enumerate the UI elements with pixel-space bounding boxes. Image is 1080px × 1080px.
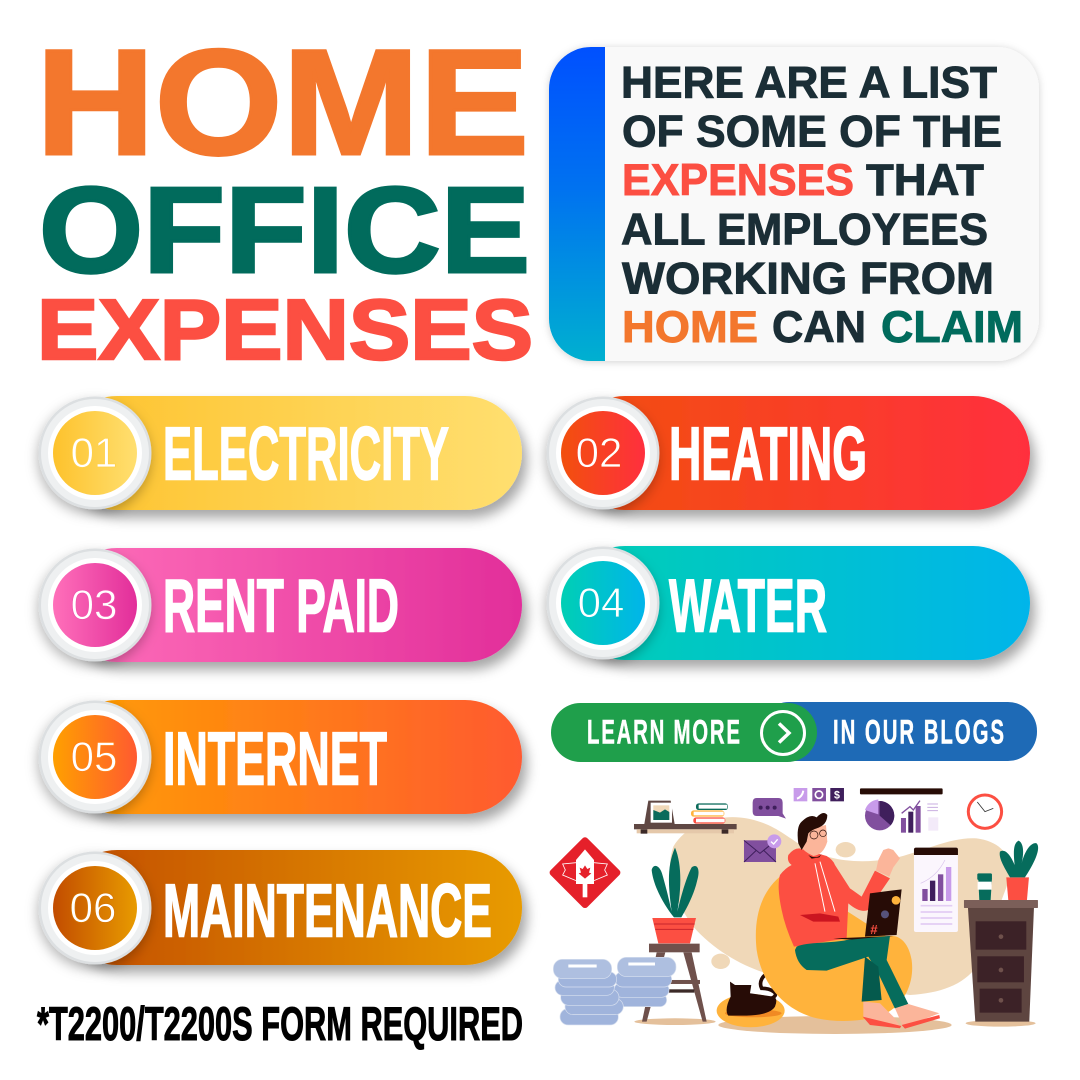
- cat on cushion: [717, 974, 785, 1027]
- feet: [863, 1002, 900, 1026]
- hoodie: [779, 848, 890, 947]
- title: OFFICE: [39, 162, 530, 298]
- pill: internet: INTERNET: [163, 716, 387, 800]
- illustration: home office: [548, 788, 1038, 1034]
- icons: contact tiles: $: [834, 790, 840, 802]
- pill: internet: 05: [71, 733, 117, 780]
- intro text: [621, 58, 1023, 352]
- intro text: WORKING FROM: [622, 254, 994, 304]
- icon: clock: [968, 795, 1002, 828]
- legs: [795, 936, 908, 1009]
- pill: electricity: 01: [71, 429, 117, 476]
- person on beanbag: [756, 813, 940, 1029]
- pill: maintenance: 06: [70, 884, 116, 931]
- button: learn more: IN OUR BLOGS: [833, 713, 1004, 751]
- intro text: HOME: [622, 303, 758, 352]
- pill: water: WATER: [669, 564, 827, 648]
- pill: rent paid: 03: [71, 581, 117, 628]
- button: learn more: LEARN MORE: [587, 713, 740, 751]
- pill: heating: 02: [576, 429, 622, 476]
- chart dashboard: [860, 788, 943, 833]
- icon: arrow in circle: [762, 712, 804, 754]
- head: [800, 825, 827, 856]
- pill: maintenance: [38, 850, 522, 965]
- intro text: THAT: [866, 156, 984, 205]
- pill: rent paid: RENT PAID: [163, 564, 399, 648]
- shelf: [634, 801, 737, 834]
- pill: internet: [38, 700, 522, 814]
- pill: heating: [546, 396, 1030, 510]
- phone chart card: [914, 848, 958, 932]
- pill: electricity: ELECTRICITY: [163, 412, 449, 496]
- cabinet with cup and plant: [964, 841, 1038, 1022]
- panel: intro: [549, 47, 1039, 361]
- intro text: CAN: [772, 303, 866, 352]
- pill: water: [546, 546, 1030, 660]
- laptop: [865, 889, 902, 937]
- floor shadows: [718, 1016, 952, 1034]
- background blob: [670, 817, 1010, 995]
- title: EXPENSES: [37, 283, 533, 378]
- icon: canadian diamond badge: [548, 836, 622, 909]
- pill: rent paid: [38, 548, 522, 662]
- icon: envelope: [744, 834, 781, 862]
- hand: [876, 848, 900, 877]
- intro text: ALL EMPLOYEES: [621, 206, 988, 254]
- title: [36, 18, 533, 378]
- plant on stool: [642, 848, 707, 1022]
- icon: chat bubble: [753, 798, 786, 819]
- pill: heating: HEATING: [669, 412, 867, 496]
- icons: contact tiles: [794, 788, 844, 802]
- coin stacks: [553, 957, 676, 1025]
- pill: maintenance: MAINTENANCE: [163, 868, 492, 952]
- footnote: *T2200/T2200S FORM REQUIRED: [37, 997, 523, 1050]
- person on beanbag: #: [870, 922, 878, 937]
- pill: electricity: [38, 396, 522, 510]
- title: HOME: [36, 18, 529, 186]
- intro text: HERE ARE A LIST: [621, 58, 997, 108]
- button: learn more: [551, 702, 1037, 762]
- intro text: OF SOME OF THE: [622, 108, 1002, 156]
- intro text: CLAIM: [881, 303, 1023, 352]
- pill: water: 04: [578, 579, 624, 626]
- intro text: EXPENSES: [622, 156, 854, 205]
- beanbag: [756, 877, 912, 1021]
